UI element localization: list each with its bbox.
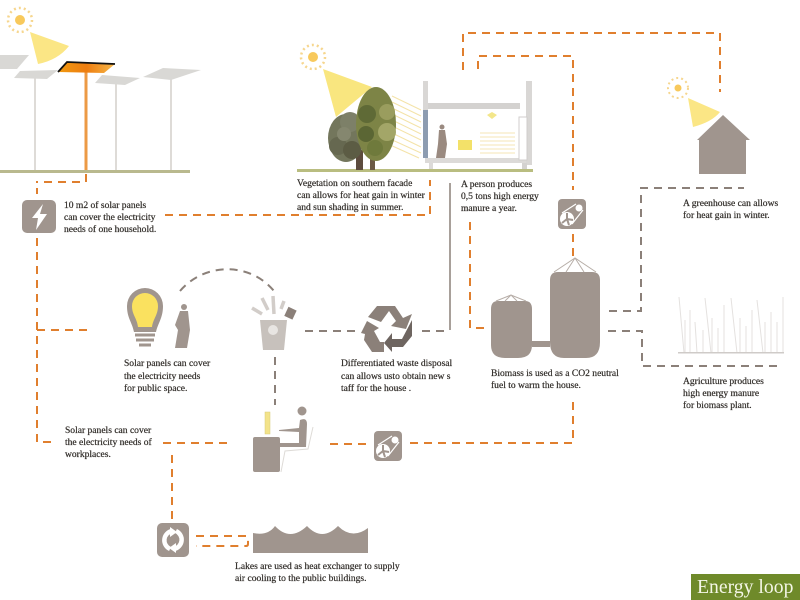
- facade shading: [423, 110, 428, 158]
- vegetation and house section: [297, 45, 533, 172]
- icon: recycle symbol: [361, 306, 412, 352]
- filtered light stripes: [388, 96, 421, 158]
- tree: right: [356, 87, 396, 170]
- icon: recycling bin: [252, 296, 297, 350]
- text: waste disposal: can allows usto obtain new s: [341, 371, 451, 382]
- building section: [423, 81, 532, 169]
- inactive solar panels: [0, 55, 201, 170]
- text: workplaces: workplaces.: [65, 449, 111, 460]
- text: workplaces: the electricity needs of: [65, 437, 152, 448]
- text: public space: Solar panels can cover: [124, 358, 211, 369]
- orange connector: to lake icon: [171, 455, 173, 520]
- sun beam: [323, 69, 372, 117]
- chart-like grass: agriculture: [678, 297, 784, 354]
- text: greenhouse: for heat gain in winter.: [683, 210, 770, 221]
- text: lakes: Lakes are used as heat exchanger to supply: [235, 561, 400, 572]
- text: biomass: fuel to warm the house.: [491, 380, 581, 391]
- orange connector: main left vertical: [37, 188, 55, 442]
- text: vegetation: Vegetation on southern facade: [297, 178, 412, 189]
- gray connector: silo to greenhouse: [609, 188, 744, 311]
- heat stripes: [480, 133, 515, 153]
- orange connector: text to workplace: [163, 442, 230, 444]
- gray connector: recycle to waste: [305, 330, 450, 332]
- orange connector: person to biomass: [470, 222, 485, 328]
- orange connector: lake double line: [196, 536, 248, 546]
- icon: sun: [668, 78, 688, 98]
- icon: lightning bolt: [22, 200, 56, 233]
- text: household: needs of one household.: [64, 224, 156, 235]
- text: workplaces: Solar panels can cover: [65, 425, 152, 436]
- gray connector: person line: [449, 183, 451, 330]
- active solar panel: [58, 62, 115, 170]
- icon: light bulb: [127, 288, 163, 345]
- icon: sun: [301, 45, 325, 69]
- icon: fan belt top: [558, 199, 586, 229]
- gray connector: silo to agriculture: [608, 331, 780, 366]
- text: agriculture: high energy manure: [683, 388, 759, 399]
- icon: fan belt bottom: [374, 431, 402, 461]
- TV: [458, 140, 472, 150]
- text: lakes: air cooling to the public buildings.: [235, 573, 367, 584]
- orange connector: household to vegetation: [165, 180, 430, 215]
- title badge: Energy loop: Energy loop: [697, 576, 794, 598]
- person: [436, 124, 447, 158]
- text: household: can cover the electricity: [64, 212, 156, 223]
- orange connector: top outer loop: [463, 33, 720, 92]
- icon: cycle arrows: [157, 523, 189, 557]
- text: public space: the electricity needs: [124, 371, 201, 382]
- orange connector: to public space: [37, 329, 87, 331]
- gray connector: bin to desk: [274, 357, 276, 405]
- gray arc: public space to bin: [180, 269, 274, 291]
- solar panel field: [0, 8, 201, 173]
- icon: lake: [253, 526, 368, 553]
- icon: house: [697, 115, 750, 174]
- text: biomass: Biomass is used as a CO2 neutral: [491, 368, 619, 379]
- text: person: manure a year.: [461, 203, 517, 214]
- text: person: 0,5 tons high energy: [461, 191, 539, 202]
- text: agriculture: for biomass plant.: [683, 400, 752, 411]
- orange connector: fan to silo: [572, 234, 574, 256]
- sun beam: [688, 98, 720, 127]
- orange connector: biomass to workplace: [408, 402, 573, 443]
- orange connector: top inner loop: [478, 56, 573, 190]
- ground line: house: [297, 169, 533, 172]
- text: waste disposal: Differentiated waste disposal: [341, 358, 453, 369]
- text: person: A person produces: [461, 179, 532, 190]
- icon: person silhouette: [175, 304, 190, 348]
- icon: biomass silos: [491, 258, 600, 358]
- sun beam: [30, 32, 69, 64]
- text: vegetation: can allows for heat gain in winter: [297, 190, 426, 201]
- text: public space: for public space.: [124, 383, 187, 394]
- text: greenhouse: A greenhouse can allows: [683, 198, 778, 209]
- tree: left: [328, 112, 364, 170]
- orange connector: solar to house: [36, 174, 86, 182]
- text: agriculture: Agriculture produces: [683, 376, 764, 387]
- icon: sun: [8, 8, 32, 32]
- orange connector: workplace to fan: [330, 443, 366, 445]
- text: vegetation: and sun shading in summer.: [297, 202, 403, 213]
- greenhouse: [668, 78, 750, 174]
- icon: workplace desk and person: [253, 406, 313, 472]
- text: waste disposal: taff for the house .: [341, 383, 411, 394]
- text: household: 10 m2 of solar panels: [64, 200, 146, 211]
- ground line: solar field: [0, 170, 190, 173]
- ceiling lamp: [487, 112, 497, 119]
